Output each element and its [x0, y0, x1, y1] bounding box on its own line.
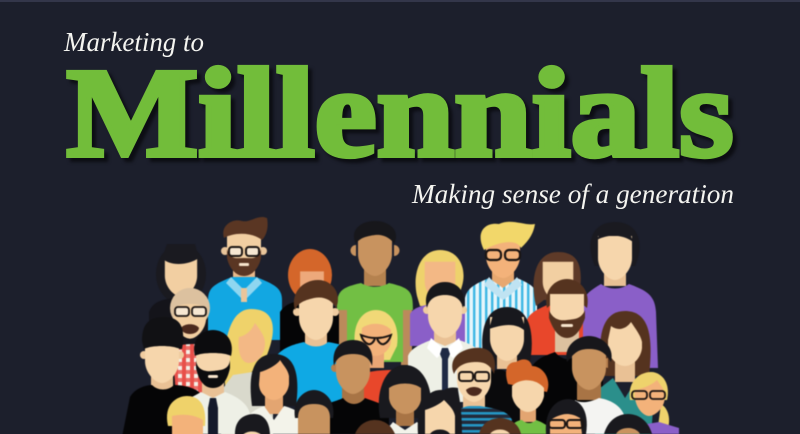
person: dark-haired woman in white blouse — [244, 354, 304, 434]
subheading: Making sense of a generation: Making sense of a generation — [411, 179, 734, 209]
illustration: crowd of millennials — [122, 217, 679, 434]
heading: Marketing to: Marketing to — [63, 27, 204, 57]
person: purple shirt woman, back right — [583, 222, 658, 368]
person: dark-skinned man in white t-shirt — [566, 336, 625, 434]
person: green shirt man — [337, 221, 413, 365]
person: bearded black-haired man, front centre — [418, 388, 462, 434]
person: red-haired woman in green — [506, 359, 554, 434]
person: bearded man in white shirt and tie — [181, 330, 251, 434]
person: blonde woman, centre left — [221, 309, 273, 434]
person: brown-haired woman in teal — [595, 311, 655, 434]
person: brown-haired person, front bottom — [479, 418, 521, 434]
person: dark-haired man, front centre left — [295, 390, 333, 434]
person: afro woman in white blouse — [379, 365, 431, 434]
person: black-haired woman in black — [479, 307, 541, 434]
person: bearded man in black — [529, 279, 603, 434]
person: bald man with glasses in check shirt — [160, 288, 210, 404]
person: blonde woman with ponytail and glasses — [630, 372, 679, 434]
person: blonde woman with cat-eye glasses — [354, 310, 402, 406]
person: blonde woman in purple — [410, 250, 472, 346]
person: orange-haired woman — [280, 249, 340, 358]
person: dark-haired person, front bottom right — [604, 414, 652, 434]
person: brown-haired man in blue — [278, 280, 356, 404]
person: dark-skinned man in black — [317, 340, 389, 434]
person: blonde man, front left — [167, 396, 205, 434]
person: brown-haired woman in red — [527, 252, 592, 355]
person: top-knot woman in black — [122, 317, 200, 434]
person: man in white shirt and tie — [408, 282, 481, 402]
person: bearded man in striped top — [452, 348, 512, 434]
person: dark-haired woman, back left — [149, 244, 215, 352]
person: brown-haired person, front centre — [355, 420, 395, 434]
title: Millennials: Millennials — [66, 44, 734, 184]
person: blue shirt bearded man — [208, 217, 282, 340]
person: man with glasses, front right — [546, 399, 587, 434]
person: blonde man in striped shirt — [465, 222, 537, 352]
person: dark-haired person, front bottom left — [235, 414, 270, 434]
